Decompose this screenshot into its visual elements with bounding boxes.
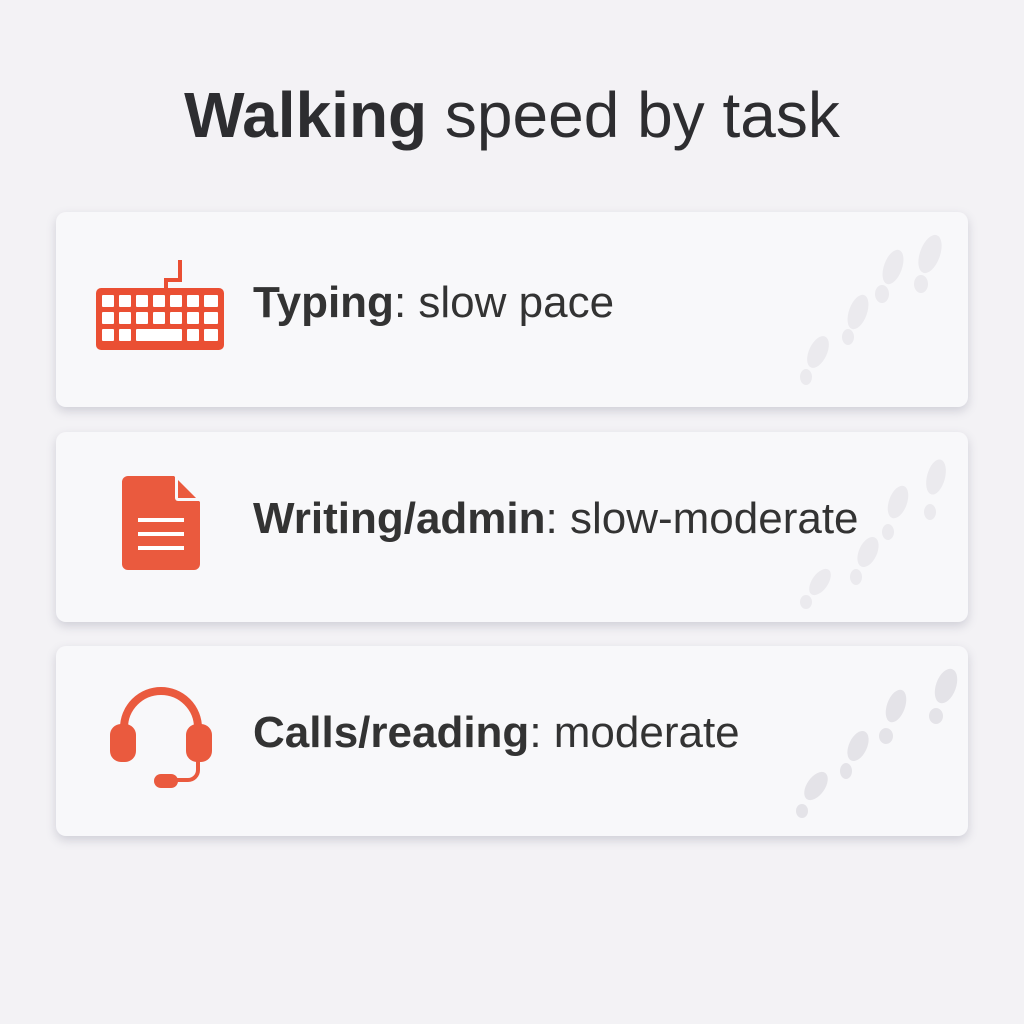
icon: keyboard	[96, 260, 224, 350]
text: typing: Typing: slow pace	[253, 278, 614, 327]
panel: writing	[56, 432, 968, 622]
panel: typing	[56, 212, 968, 407]
text: writing: Writing/admin: slow-moderate	[253, 494, 859, 543]
title: Walking speed by task	[184, 79, 840, 151]
footprints	[800, 460, 946, 609]
panel: calls	[56, 646, 968, 836]
icon: headset	[110, 687, 212, 788]
footprints	[796, 668, 958, 818]
icon: document	[122, 476, 200, 570]
text: calls: Calls/reading: moderate	[253, 708, 740, 757]
footprints	[800, 235, 942, 385]
